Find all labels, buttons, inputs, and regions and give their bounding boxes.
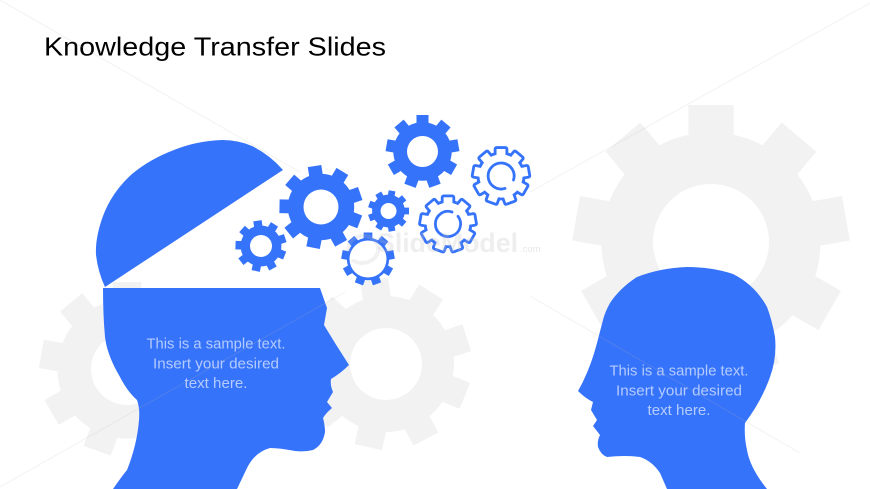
gear: small solid left <box>232 217 290 275</box>
gear: ring <box>341 232 395 285</box>
watermark logo <box>349 236 378 263</box>
text block left <box>146 336 286 392</box>
gear: outline middle <box>421 197 475 251</box>
head right <box>578 267 775 489</box>
background gear: left <box>39 282 215 456</box>
gear: outline right <box>474 149 528 203</box>
head left: lifted skull cap <box>96 140 283 287</box>
gear: large solid center <box>273 159 369 254</box>
head left: lower face <box>103 288 349 489</box>
text block right <box>610 364 748 419</box>
gear: small solid center <box>364 187 413 235</box>
background gear: right large <box>572 105 850 378</box>
text block left: text here. <box>184 376 248 392</box>
text block right: text here. <box>648 403 710 419</box>
watermark suffix: .com <box>520 244 541 255</box>
title: Knowledge Transfer Slides <box>44 32 386 62</box>
watermark: SlideModel <box>377 228 518 258</box>
text block left: This is a sample text. <box>146 336 286 352</box>
text block right: Insert your desired <box>616 384 742 400</box>
text block left: Insert your desired <box>153 356 279 372</box>
gear: large solid top <box>386 115 459 188</box>
background gear: center <box>289 268 483 460</box>
text block right: This is a sample text. <box>610 364 748 380</box>
